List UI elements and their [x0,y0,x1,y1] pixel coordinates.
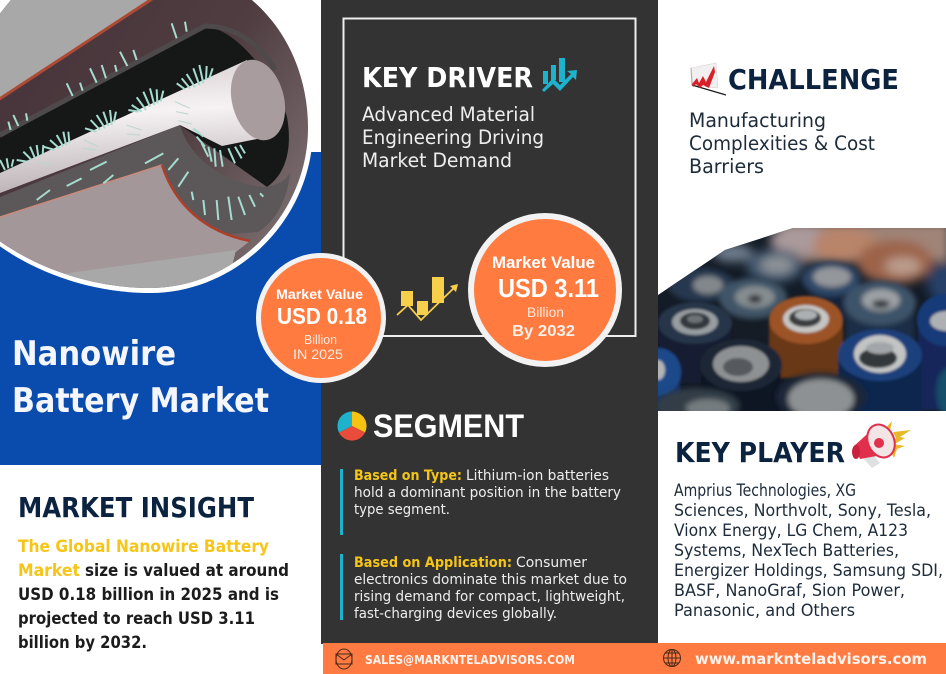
heading: segment: SEGMENT [373,408,524,444]
heading: market insight: MARKET INSIGHT [18,491,254,524]
text: market insight paragraph: The Global Nanowire Battery [18,537,269,556]
segment: based on type: hold a dominant position in the battery [354,485,621,501]
text: challenge description: Manufacturing [689,109,826,132]
callout: market value 2025: USD 0.18 [277,303,367,329]
text: market insight paragraph: projected to reach USD 3.11 [18,609,255,628]
segment: based on type: Based on Type: [354,468,462,484]
icon: segment pie [337,411,367,441]
title: Nanowire Battery Market [12,334,269,421]
segment: based on application: Consumer [516,555,587,571]
icon: envelope [336,649,352,669]
heading: key driver: KEY DRIVER [362,61,533,94]
heading: key player: KEY PLAYER [675,436,845,469]
callout: market value 2025: IN 2025 [293,346,343,362]
image: nanowire battery cross section [0,0,320,300]
callout: market value 2025 [258,256,384,380]
text: website: www.marknteladvisors.com [695,650,927,668]
icon: challenge chart [691,63,726,95]
text: key driver description [362,103,544,172]
panel: contact footer [323,643,946,674]
segment: based on application: rising demand for compact, lightweight, [354,589,625,605]
callout: market value 2025: Market Value [276,287,364,302]
text: key driver description: Engineering Driving [362,126,544,149]
text: key driver description: Market Demand [362,149,512,172]
text: key player list: BASF, NanoGraf, Sion Power, [674,581,905,600]
segment: based on type: type segment. [354,502,450,518]
panel: dark centre column [321,0,658,644]
segment: based on type [340,468,621,535]
text: key player list: Sciences, Northvolt, Sony, Tesla, [674,501,931,520]
text: market insight paragraph: USD 0.18 billion in 2025 and is [18,585,279,604]
text: market insight paragraph: billion by 2032. [18,633,147,652]
segment: based on application [340,554,627,622]
text: key player list: Panasonic, and Others [674,601,855,620]
panel: blue title block [0,152,321,465]
text: email: SALES@MARKNTELADVISORS.COM [365,653,575,667]
callout: market value 2032: Billion [527,304,564,320]
icon: rising chart [542,58,577,92]
callout: market value 2025: Billion [304,333,337,347]
segment: based on application: Based on Application: [354,555,512,571]
callout: market value 2032: Market Value [492,254,595,272]
text: key driver description: Advanced Material [362,103,535,126]
callout: market value 2032: USD 3.11 [498,273,599,303]
icon: megaphone [852,420,911,468]
callout: market value 2032: By 2032 [512,323,575,340]
heading: challenge: CHALLENGE [728,63,899,96]
text: key player list [674,481,943,620]
text: key player list: Systems, NexTech Batteries, [674,541,899,560]
callout: market value 2032 [471,216,619,364]
text: market insight paragraph: Market [18,561,80,580]
segment: based on application: electronics dominate this market due to [354,572,627,588]
text: challenge description [689,109,875,178]
text: market insight paragraph [18,537,289,652]
segment: based on type: Lithium-ion batteries [466,468,609,484]
text: key player list: Amprius Technologies, XG [674,481,856,500]
text: key player list: Vionx Energy, LG Chem, A123 [674,521,908,540]
text: market insight paragraph: size is valued at around [85,561,289,580]
segment: based on application: fast-charging devices globally. [354,606,557,622]
title: Nanowire Battery Market: Battery Market [12,381,269,421]
text: challenge description: Complexities & Cost [689,132,875,155]
image: batteries photo [658,228,946,411]
icon: growth chart between values [397,277,458,320]
title: Nanowire Battery Market: Nanowire [12,334,176,374]
icon: globe [664,650,680,666]
text: challenge description: Barriers [689,155,764,178]
panel: key driver frame [344,18,636,336]
